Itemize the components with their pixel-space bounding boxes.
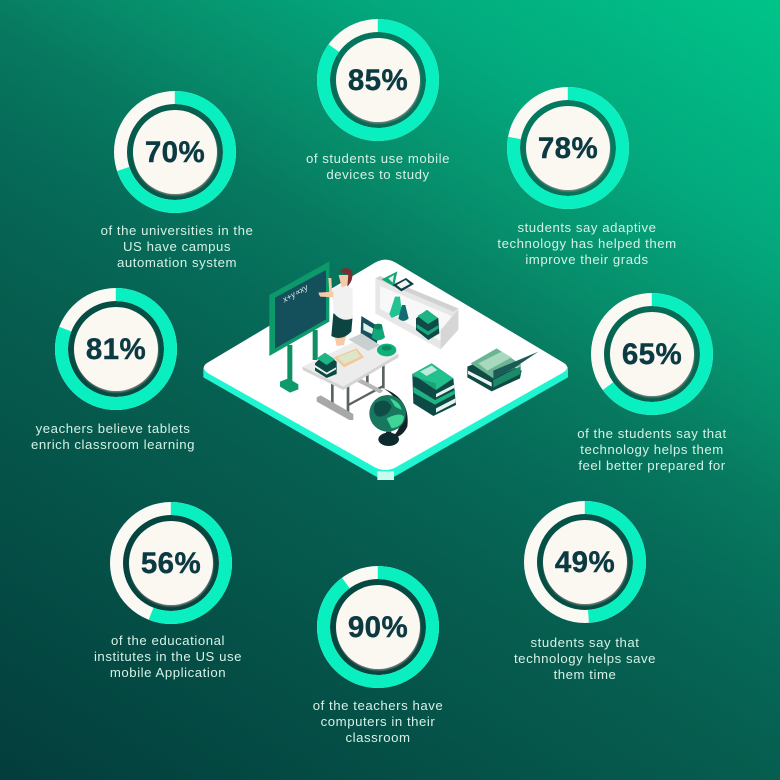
caption: 90%	[313, 698, 443, 745]
caption: 90%: computers in their	[321, 714, 435, 729]
caption: 56%: institutes in the US use	[94, 649, 242, 664]
caption: 78%: technology has helped them	[497, 236, 677, 251]
stat ring: 56%: 56%	[141, 547, 201, 580]
stat ring: 65%	[598, 300, 706, 408]
caption: 81%: enrich classroom learning	[31, 437, 195, 452]
caption: 78%	[497, 220, 677, 267]
stat ring: 70%: 70%	[145, 136, 205, 169]
caption: 78%: students say adaptive	[517, 220, 657, 235]
open book	[334, 348, 364, 367]
stat ring: 85%	[324, 26, 432, 134]
stat ring: 81%	[62, 294, 170, 404]
caption: 56%	[94, 633, 242, 680]
stat ring: 90%: 90%	[348, 611, 408, 644]
caption: 70%: automation system	[117, 255, 237, 270]
stat ring: 65%: 65%	[622, 338, 682, 371]
stat ring: 85%: 85%	[348, 64, 408, 97]
shelf flasks	[389, 297, 409, 321]
caption: 70%	[101, 223, 253, 270]
desk	[303, 339, 398, 420]
teacher	[318, 268, 353, 346]
globe	[369, 388, 408, 446]
caption: 49%: students say that	[530, 635, 640, 650]
caption: 90%: classroom	[345, 730, 411, 745]
book stack	[412, 363, 456, 416]
stat ring: 70%	[120, 98, 230, 206]
caption: 78%: improve their grads	[525, 252, 649, 267]
stat ring: 78%	[514, 94, 622, 202]
stat ring: 90%	[324, 572, 432, 682]
platform	[203, 260, 568, 480]
shelf triangle ruler	[382, 271, 397, 287]
caption: 90%: of the teachers have	[313, 698, 443, 713]
caption: 56%: of the educational	[111, 633, 225, 648]
laptop	[348, 316, 380, 351]
desk plate	[377, 344, 396, 356]
stat ring: 81%: 81%	[86, 333, 146, 366]
stat ring: 49%	[530, 508, 640, 616]
caption: 65%: feel better prepared for	[578, 458, 726, 473]
caption: 81%: yeachers believe tablets	[36, 421, 190, 436]
caption: 85%: of students use mobile	[306, 151, 450, 166]
stat ring: 78%: 78%	[538, 132, 598, 165]
caption: 49%: them time	[554, 667, 616, 682]
shelf tablet	[393, 278, 414, 291]
caption: 49%	[514, 635, 656, 682]
caption: 65%: technology helps them	[580, 442, 724, 457]
caption: 85%	[306, 151, 450, 182]
chalkboard: x+y∝xy	[280, 282, 310, 305]
stat ring: 56%	[116, 508, 226, 618]
caption: 65%: of the students say that	[577, 426, 727, 441]
caption: 56%: mobile Application	[110, 665, 226, 680]
caption: 85%: devices to study	[326, 167, 430, 182]
flask	[372, 324, 385, 340]
chalkboard	[269, 261, 329, 393]
caption: 49%: technology helps save	[514, 651, 656, 666]
printer and books	[467, 348, 538, 391]
desk book stack	[315, 353, 337, 378]
caption: 70%: of the universities in the	[101, 223, 253, 238]
caption: 81%	[31, 421, 195, 452]
caption: 65%	[577, 426, 727, 473]
isometric classroom illustration	[203, 260, 568, 480]
stat ring: 49%: 49%	[555, 546, 615, 579]
caption: 70%: US have campus	[123, 239, 231, 254]
bookshelf	[375, 276, 458, 349]
shelf books	[416, 310, 439, 340]
